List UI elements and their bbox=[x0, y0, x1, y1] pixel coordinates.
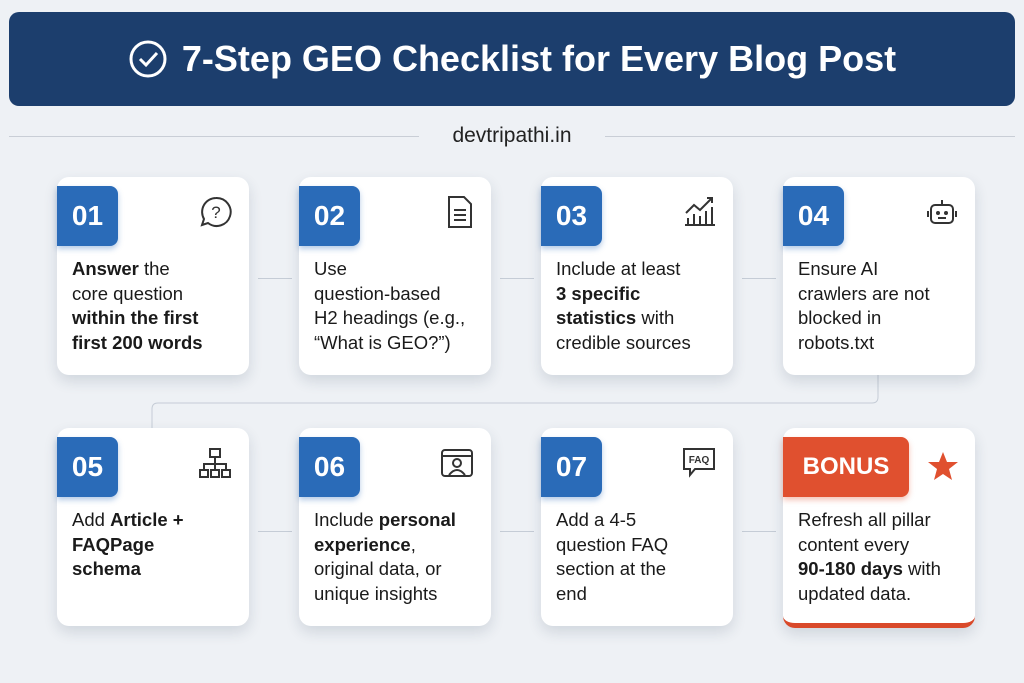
card bonus bbox=[783, 428, 975, 628]
card 06: Include personal bbox=[314, 509, 456, 530]
card 03: Include at least bbox=[556, 258, 680, 279]
card 02: 02 bbox=[314, 200, 345, 231]
card 04: Ensure AI bbox=[798, 258, 878, 279]
card 02: Use bbox=[314, 258, 347, 279]
card 01: 01 bbox=[72, 200, 103, 231]
card bonus: updated data. bbox=[798, 582, 911, 604]
card 03: 03 bbox=[556, 200, 587, 231]
card bonus: content every bbox=[798, 534, 909, 554]
card 07: section at the bbox=[556, 558, 666, 579]
card 06: 06 bbox=[314, 451, 345, 482]
card 03: statistics with bbox=[556, 307, 674, 328]
card 07: question FAQ bbox=[556, 534, 668, 554]
card 01: Answer the bbox=[72, 258, 170, 279]
card 05: schema bbox=[72, 558, 141, 579]
card 05: Add Article + bbox=[72, 509, 184, 530]
card 07: FAQ bbox=[689, 455, 709, 466]
card 07 bbox=[541, 428, 733, 626]
card 04: blocked in bbox=[798, 307, 881, 328]
card 01: first 200 words bbox=[72, 332, 203, 352]
card 07: end bbox=[556, 582, 587, 604]
card 05: 05 bbox=[72, 451, 103, 482]
card 03: credible sources bbox=[556, 332, 691, 352]
card 05 bbox=[57, 428, 249, 626]
card 01: core question bbox=[72, 282, 183, 304]
card 02: H2 headings (e.g., bbox=[314, 307, 465, 328]
card bonus: Refresh all pillar bbox=[798, 509, 931, 530]
card 07: Add a 4-5 bbox=[556, 509, 636, 530]
card bonus: 90-180 days with bbox=[798, 558, 941, 579]
card 06: experience, bbox=[314, 534, 416, 554]
card 06 bbox=[299, 428, 491, 626]
card 05: FAQPage bbox=[72, 534, 154, 554]
subtitle: site: devtripathi.in bbox=[452, 124, 572, 147]
arrows bbox=[258, 278, 292, 279]
card 06: original data, or bbox=[314, 558, 442, 579]
card 07: 07 bbox=[556, 451, 587, 482]
card 04: 04 bbox=[798, 200, 829, 231]
card 03 bbox=[541, 177, 733, 375]
card 02: “What is GEO?”) bbox=[314, 332, 451, 352]
card 01 bbox=[57, 177, 249, 375]
card 04 bbox=[783, 177, 975, 375]
card 01: within the first bbox=[72, 307, 198, 328]
card bonus: BONUS bbox=[803, 453, 889, 480]
card 01: ? bbox=[211, 203, 221, 222]
title banner: 7-Step GEO Checklist for Every Blog Post bbox=[182, 38, 896, 79]
card 04: robots.txt bbox=[798, 332, 874, 352]
card 06: unique insights bbox=[314, 582, 437, 604]
card 03: 3 specific bbox=[556, 282, 640, 304]
title banner bbox=[9, 12, 1015, 106]
card 04: crawlers are not bbox=[798, 282, 930, 304]
card 02: question-based bbox=[314, 282, 441, 304]
card 02 bbox=[299, 177, 491, 375]
